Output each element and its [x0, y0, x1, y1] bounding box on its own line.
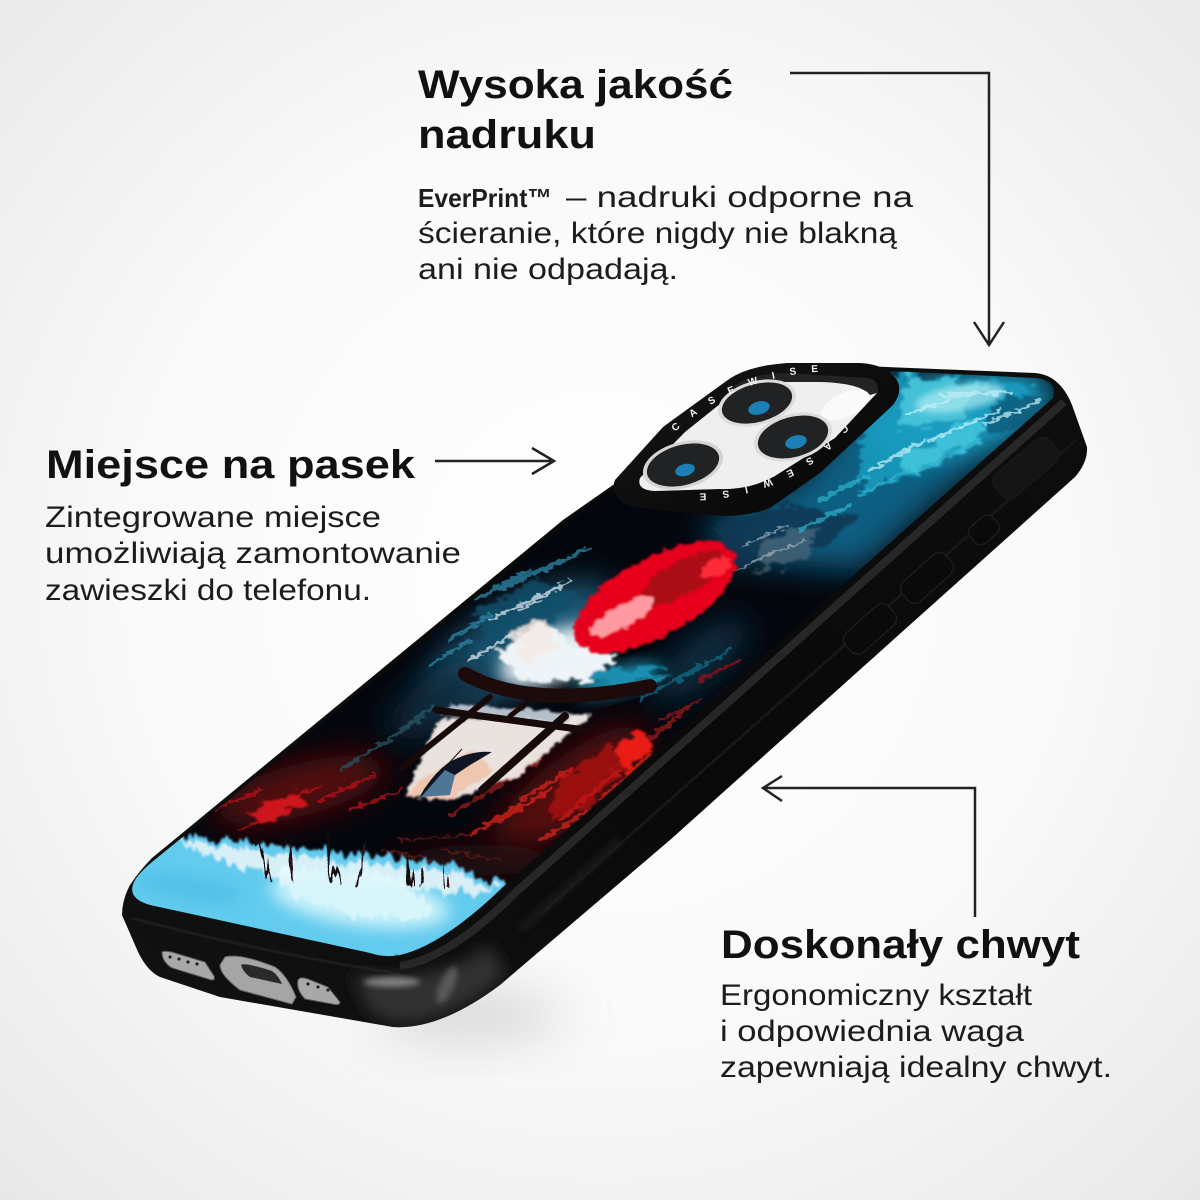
- charging port: [220, 956, 296, 1004]
- body: brand name: EverPrint™: [418, 183, 552, 213]
- phone case: [122, 363, 1088, 1028]
- arrow: grip: [763, 776, 975, 917]
- art: torii gate: [402, 674, 650, 790]
- grip body line 3: zapewniają idealny chwyt.: [720, 1051, 1112, 1084]
- strap slot: [989, 433, 1063, 503]
- callout: grip: [720, 923, 1112, 1084]
- body line 3: ani nie odpadają.: [418, 253, 678, 286]
- callout: strap slot: [45, 443, 461, 607]
- volume button: [897, 549, 957, 607]
- arrow: strap slot: [435, 448, 554, 474]
- heading line 2: nadruku: [418, 113, 596, 157]
- arrow: print quality: [790, 73, 1004, 345]
- art: blue sky: [720, 375, 1045, 575]
- camera window: [639, 377, 877, 491]
- lens 2: [748, 404, 838, 470]
- phone shadow: [375, 992, 565, 1040]
- strap body line 1: Zintegrowane miejsce: [45, 501, 381, 534]
- printed artwork: [120, 358, 1080, 980]
- camera brand text: CASEWISE: [672, 365, 818, 430]
- action button: [840, 600, 900, 658]
- side switch: [965, 512, 1003, 548]
- heading: strap slot: Miejsce na pasek: [46, 443, 416, 487]
- body line 2: ścieranie, które nigdy nie blakną: [418, 217, 897, 250]
- heading: grip: Doskonały chwyt: [721, 923, 1080, 967]
- lens 3: [637, 432, 729, 498]
- art: water: [120, 832, 520, 960]
- right speaker: [298, 978, 340, 1005]
- art: clouds: [470, 580, 670, 695]
- art: soft colour washes: [206, 358, 1056, 876]
- camera brand text lower: CASEWISE: [700, 426, 848, 500]
- camera ring: [614, 363, 899, 516]
- art: samurai figure: [420, 749, 492, 797]
- art: torii gate light: [405, 705, 592, 800]
- left speaker: [162, 951, 214, 980]
- bottom ports: [162, 951, 340, 1005]
- lens 1: [713, 371, 801, 435]
- case body: [122, 363, 1087, 1027]
- art: red moon: [571, 538, 740, 656]
- case side details: [132, 402, 1076, 1024]
- grip body line 2: i odpowiednia waga: [720, 1015, 1024, 1048]
- art: foliage: [240, 730, 655, 825]
- camera bump: [614, 363, 900, 516]
- heading: print quality: Wysoka jakość: [418, 63, 733, 107]
- strap body line 2: umożliwiają zamontowanie: [45, 537, 461, 570]
- grip body line 1: Ergonomiczny kształt: [720, 979, 1033, 1012]
- side buttons: [840, 433, 1063, 658]
- body line 1: – nadruki odporne na: [566, 181, 913, 214]
- art: brush strokes: [215, 392, 1040, 860]
- strap body line 3: zawieszki do telefonu.: [45, 574, 371, 607]
- callout: print quality: [418, 63, 913, 286]
